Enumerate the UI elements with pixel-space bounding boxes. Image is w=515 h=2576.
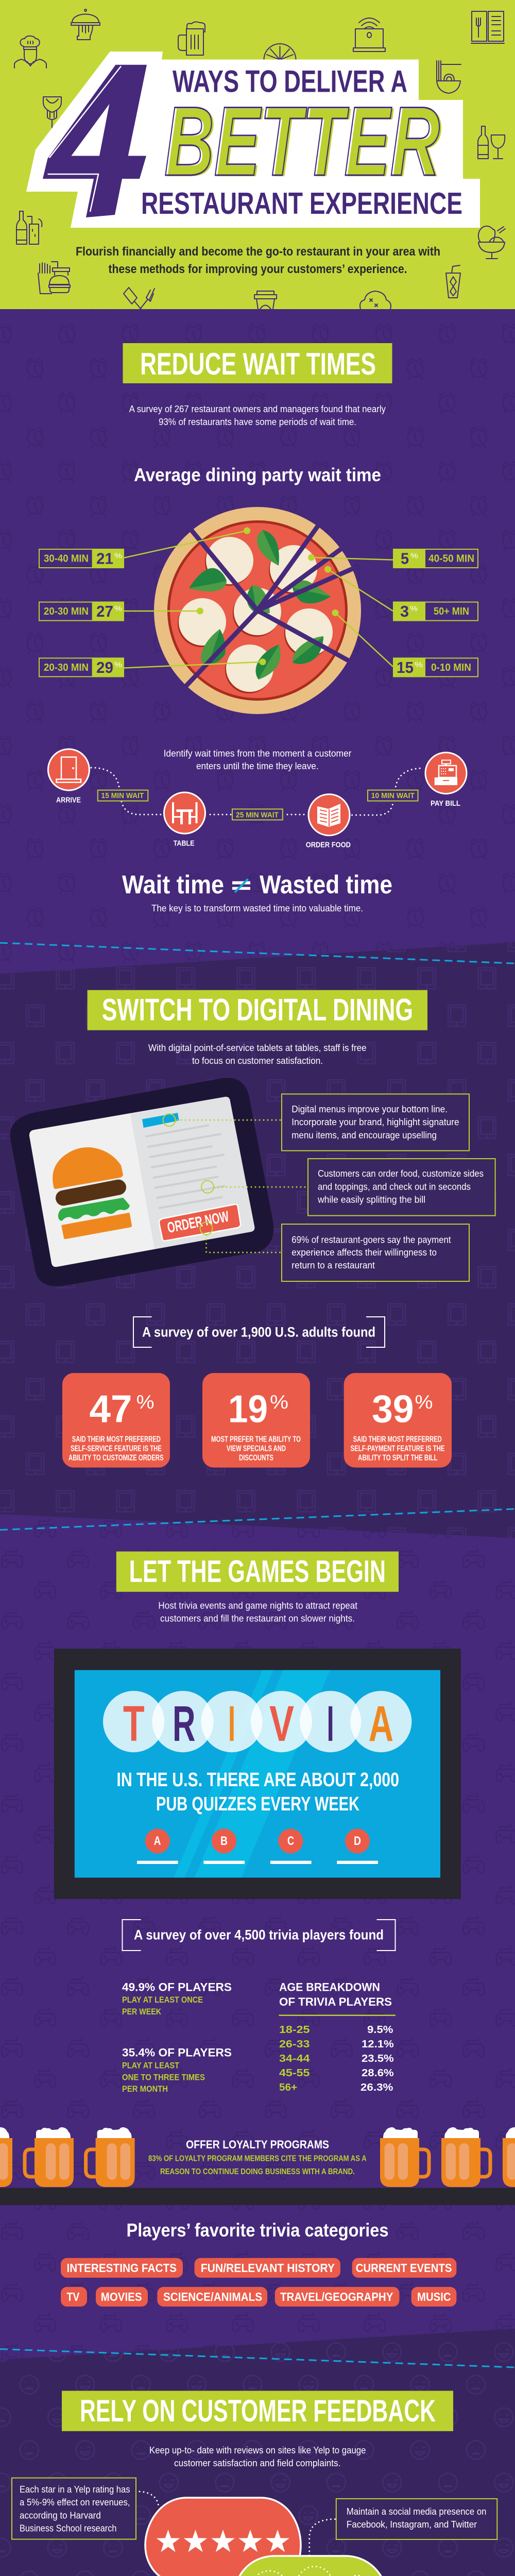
order now button: ORDER NOW [166,1208,231,1236]
stat card: 47%: ABILITY TO CUSTOMIZE ORDERS [68,1453,164,1462]
trivia word: A [369,1696,393,1752]
timeline intro text [164,748,351,771]
stat: 49.9% of players [122,1980,232,2016]
chart label: 15% 0-10 min: 15 [397,658,414,676]
pizza chart [154,507,361,714]
icon: noodle bowl [437,61,461,93]
answer buttons: B [220,1834,228,1848]
step: order food [306,794,351,849]
heading: REDUCE WAIT TIMES [140,347,376,381]
chart label: 15% 0-10 min: 0-10 MIN [431,662,471,673]
chart label: 20-30 min 27% [39,602,124,621]
trivia word: T [123,1696,145,1752]
category pills: TV [67,2290,80,2303]
chart label: 30-40 min 21% [39,549,124,568]
table: age breakdown: 18-25 [279,2024,310,2036]
answer buttons: A [153,1834,161,1848]
category pills: CURRENT EVENTS [356,2261,452,2275]
table: age breakdown: 45-55 [279,2067,310,2079]
icon: burger and fries [38,262,70,294]
loyalty program text [148,2138,367,2176]
stat card: 19%: % [270,1392,288,1413]
callout: ordering: while easily splitting the bill [317,1194,425,1205]
step: table: TABLE [174,839,195,848]
title line 1: WAYS TO DELIVER A [173,64,407,99]
callout: ordering: Customers can order food, customize sides [318,1168,484,1179]
icon: chef [14,36,46,68]
panel: wait times background [0,309,515,979]
chart label: 15% 0-10 min: % [415,660,423,669]
stitched divider: section 3 to 4 [0,2349,515,2367]
icon: take-away cup [254,291,277,309]
callout: yelp rating: Business School research [20,2523,116,2533]
survey heading: 1,900 adults: A survey of over 1,900 U.S. adults found [142,1325,375,1340]
callout: digital menus: Incorporate your brand, highlight signature [291,1117,459,1127]
callout: digital menus: Digital menus improve your bottom line. [291,1104,448,1114]
stat card: 39%: 39 [372,1387,414,1431]
beer mugs and shelf [0,2127,515,2205]
step: table [164,792,205,848]
statement caption: The key is to transform wasted time into valuable time. [151,903,363,913]
stat: 35.4% of players: ONE TO THREE TIMES [122,2072,205,2082]
stat card: 39%: SAID THEIR MOST PREFERRED [353,1435,442,1444]
callout: social media: Facebook, Instagram, and Twitter [347,2519,477,2530]
table: age breakdown: 28.6% [362,2067,394,2079]
table: age breakdown: 9.5% [367,2024,393,2036]
order now button [159,1205,241,1241]
title backing shape [26,52,480,228]
heading: LET THE GAMES BEGIN [129,1554,386,1588]
table: age breakdown [279,1980,396,2093]
chart label: 20-30 min 27%: 20-30 MIN [44,606,89,617]
icon: cloche on hand [71,9,100,40]
intro text: Host trivia events and game nights to attract repeat [158,1600,357,1611]
icon: twitter [342,2575,371,2576]
stitched divider: section 1 to 2 [0,943,515,963]
title block [26,52,480,228]
tablet illustration [10,1078,273,1286]
trivia word: V [269,1696,294,1752]
wait badge: 25 min: 25 MIN WAIT [236,811,279,819]
answer buttons [137,1829,378,1864]
burger [53,1147,132,1239]
chart label: 3% 50+ min: 50+ MIN [434,606,469,617]
table: age breakdown: AGE BREAKDOWN [279,1980,380,1993]
category pills [61,2258,456,2307]
icon: wine and glass [478,126,505,159]
callout: ordering [308,1159,495,1216]
big number 4 [43,65,147,217]
chart label: 5% 40-50 min [393,549,478,568]
callout: payment: 69% of restaurant-goers say the payment [291,1234,451,1245]
hero subtitle: Flourish financially and become the go-to restaurant in your area with [76,245,440,259]
chart label: 5% 40-50 min: 40-50 MIN [428,553,474,565]
stat card: 39%: SELF-PAYMENT FEATURE IS THE [350,1445,445,1453]
loyalty program text: REASON TO CONTINUE DOING BUSINESS WITH A BRAND. [160,2167,355,2176]
icon: dessert fork [43,97,61,129]
intro text [149,2445,366,2468]
category pills: TRAVEL/GEOGRAPHY [280,2290,393,2303]
stat card: 47%: 47 [90,1387,132,1431]
callout: digital menus [282,1094,469,1151]
hero icons [14,9,505,309]
timeline intro text: enters until the time they leave. [196,761,319,771]
survey heading: 4,500 trivia players [123,1920,396,1951]
intro text: customer satisfaction and field complaints. [174,2458,340,2468]
stat card: 47% [62,1373,170,1467]
statement: wait time is not wasted time [122,870,392,899]
chart label: 20-30 min 29%: 20-30 MIN [44,662,89,673]
step: arrive [48,749,89,805]
category pills: FUN/RELEVANT HISTORY [201,2261,335,2275]
callout: social media [336,2499,497,2539]
icon: tall glass [446,265,460,298]
stat: 35.4% of players [122,2046,232,2094]
stat card: 19% [202,1373,310,1467]
intro text: 93% of restaurants have some periods of wait time. [159,417,356,427]
callout: yelp rating: Each star in a Yelp rating has [20,2484,130,2495]
survey heading: 4,500 trivia players: A survey of over 4,500 trivia players found [134,1927,384,1943]
stat card: 39% [344,1373,452,1467]
stat card: 19%: 19 [228,1387,268,1431]
heading: SWITCH TO DIGITAL DINING [102,993,413,1027]
callout connectors [163,1114,308,1252]
chart label: 20-30 min 29%: 29 [96,658,113,676]
trivia fact: PUB QUIZZES EVERY WEEK [156,1793,359,1815]
trivia word: R [173,1696,196,1752]
section 1: reduce wait times [39,343,478,913]
section 4: rely on customer feedback [12,2391,497,2576]
trivia tv screen [54,1649,461,1899]
trivia word: I [327,1696,334,1752]
trivia fact [116,1769,399,1815]
hero subtitle: these methods for improving your customers’ experience. [108,262,407,276]
intro text: customers and fill the restaurant on slower nights. [160,1613,355,1623]
chart label: 30-40 min 21%: % [114,551,122,560]
stitched divider: section 2 to 3 [0,1509,515,1530]
callout: payment [282,1224,469,1281]
stat: 35.4% of players: PLAY AT LEAST [122,2061,180,2071]
chart label: 20-30 min 27%: % [114,604,122,613]
chart leader lines [124,528,393,668]
table: age breakdown: 12.1% [362,2039,394,2050]
icon: menu book [471,11,504,43]
icon: beer mug [178,22,205,55]
table: age breakdown: 56+ [279,2082,297,2093]
chart label: 30-40 min 21%: 21 [96,549,113,568]
trivia fact: IN THE U.S. THERE ARE ABOUT 2,000 [116,1769,399,1791]
chart title: Average dining party wait time [134,464,381,485]
stat card: 19%: MOST PREFER THE ABILITY TO [211,1435,301,1444]
table: age breakdown: 26.3% [360,2082,393,2093]
stat: 35.4% of players: PER MONTH [122,2084,168,2094]
trivia word: I [228,1696,235,1752]
wait badge: 15 min: 15 MIN WAIT [101,791,144,800]
icon: ice cream [478,226,505,259]
stat card: 39%: % [415,1392,433,1413]
category pills: SCIENCE/ANIMALS [163,2290,262,2303]
icon: facebook [250,2571,288,2576]
stat card: 47%: % [136,1392,154,1413]
chart label: 20-30 min 27%: 27 [96,602,113,620]
table: age breakdown: 34-44 [279,2053,310,2064]
stat: 49.9% of players: PLAY AT LEAST ONCE [122,1995,203,2005]
category pills: MOVIES [101,2290,142,2303]
chart label: 5% 40-50 min: % [410,551,418,560]
intro text [129,404,386,427]
panel: hero background [0,0,515,309]
intro text: A survey of 267 restaurant owners and managers found that nearly [129,404,386,414]
callout: payment: experience affects their willingness to [291,1247,437,1258]
heading [116,1551,399,1592]
intro text [158,1600,357,1623]
stat card: 39%: ABILITY TO SPLIT THE BILL [358,1453,438,1462]
loyalty program text: 83% OF LOYALTY PROGRAM MEMBERS CITE THE PROGRAM AS A [148,2155,367,2163]
trivia light bulbs [103,1691,411,1752]
stat: 49.9% of players: 49.9% OF PLAYERS [122,1980,232,1993]
stat: 35.4% of players: 35.4% OF PLAYERS [122,2046,232,2059]
chart label: 30-40 min 21%: 30-40 MIN [44,553,89,565]
chart label: 3% 50+ min [393,602,478,621]
categories heading: Players’ favorite trivia categories [127,2219,388,2241]
speech bubble: stars [145,2498,301,2576]
step: arrive: ARRIVE [56,795,81,805]
stat card: 19%: VIEW SPECIALS AND [227,1445,286,1453]
chart label: 20-30 min 29% [39,657,124,677]
menu text lines [145,1125,225,1208]
intro text: to focus on customer satisfaction. [192,1056,323,1066]
statement: wait time is not wasted time: Wait time [122,870,224,899]
callout: ordering: and toppings, and check out in seconds [318,1182,471,1192]
table: age breakdown: 26-33 [279,2039,310,2050]
chart label: 3% 50+ min: 3 [400,602,409,620]
chart label: 15% 0-10 min [393,657,478,677]
timeline intro text: Identify wait times from the moment a customer [164,748,351,758]
stat card: 19%: DISCOUNTS [239,1453,273,1462]
table: age breakdown: OF TRIVIA PLAYERS [279,1995,392,2008]
stat card: 47%: SAID THEIR MOST PREFERRED [72,1435,161,1444]
answer buttons: C [287,1834,294,1848]
intro text [148,1043,367,1066]
answer buttons: D [354,1834,361,1848]
icon: spatula and fork [124,287,154,309]
step: pay bill [425,753,467,808]
callout: yelp rating: according to Harvard [20,2510,101,2520]
heading [123,343,392,383]
icon: bottle and drink [16,211,42,244]
icon: tree shape [360,291,391,309]
callout: digital menus: menu items, and encourage upselling [291,1130,437,1141]
section 2: switch to digital dining [10,990,495,1467]
stat: 49.9% of players: PER WEEK [122,2007,162,2016]
wait badge: 10 min: 10 MIN WAIT [371,791,415,800]
step: order food: ORDER FOOD [306,841,351,849]
menu heading bar [142,1113,179,1128]
chart label: 3% 50+ min: % [410,604,418,613]
loyalty program text: OFFER LOYALTY PROGRAMS [186,2138,329,2151]
panel: digital dining background [0,942,515,1538]
intro text: Keep up-to- date with reviews on sites like Yelp to gauge [149,2445,366,2455]
chart label: 20-30 min 29%: % [114,660,122,669]
panel: customer feedback background [0,2329,515,2576]
intro text: With digital point-of-service tablets at tables, staff is free [148,1043,367,1053]
callout: yelp rating [12,2478,136,2539]
category pills: INTERESTING FACTS [67,2261,177,2275]
stat card: 47%: SELF-SERVICE FEATURE IS THE [71,1445,162,1453]
trivia word [123,1696,393,1752]
timeline dotted connectors [91,768,424,815]
panel: games background [0,1514,515,2360]
dotted connectors [140,2492,335,2576]
category pills: MUSIC [417,2290,451,2303]
heading [88,990,427,1030]
callout: social media: Maintain a social media presence on [347,2506,486,2517]
icon: pizza wheel [264,44,296,60]
icon: google plus [297,2567,333,2576]
callout: yelp rating: a 5%-9% effect on revenues, [20,2497,130,2507]
table: age breakdown: 23.5% [362,2053,394,2064]
hero subtitle [76,245,440,276]
speech bubble: social media [233,2556,388,2576]
icon: laptop wifi [353,18,385,52]
callout: payment: return to a restaurant [291,1260,375,1270]
section 3: let the games begin [0,1551,515,2576]
statement: wait time is not wasted time: Wasted time [260,870,392,899]
chart label: 5% 40-50 min: 5 [401,549,409,568]
survey heading: 1,900 adults [133,1317,385,1347]
step: pay bill: PAY BILL [431,799,460,808]
